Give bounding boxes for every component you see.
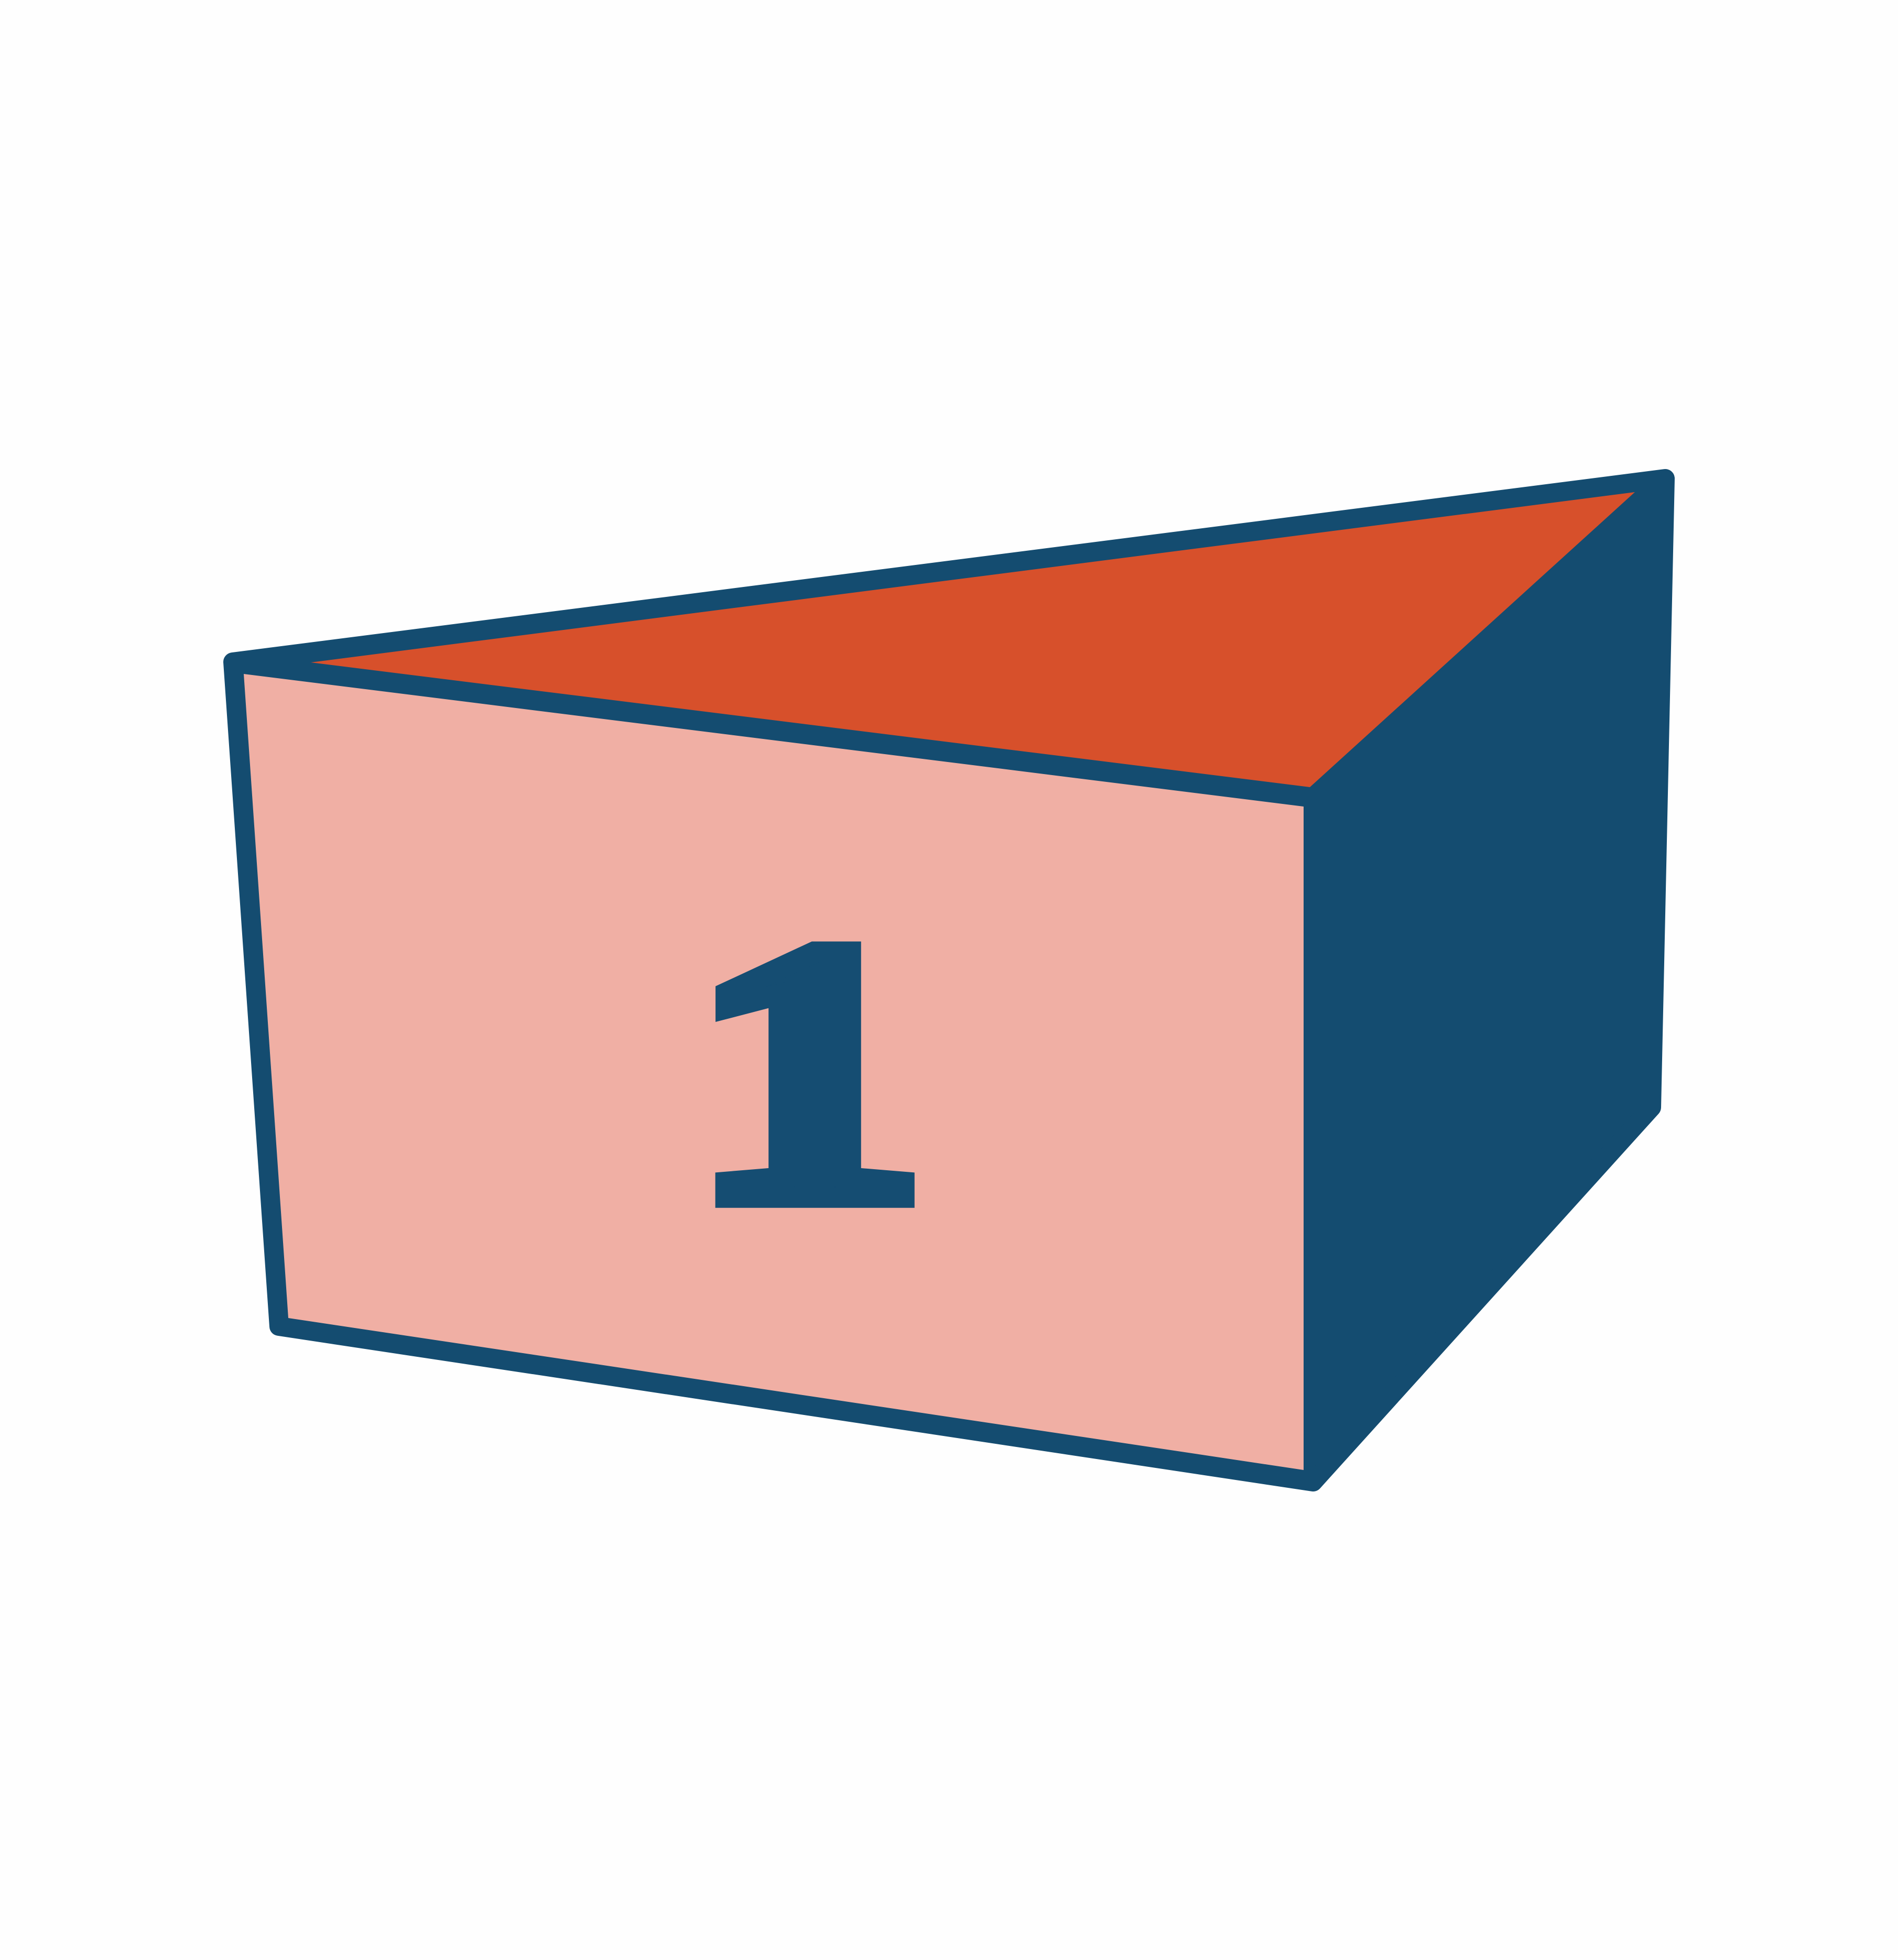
front face: [244, 674, 1304, 1470]
right side face and outline: [233, 478, 1665, 1482]
number label: 1: [691, 866, 926, 1278]
top face: [311, 492, 1635, 787]
